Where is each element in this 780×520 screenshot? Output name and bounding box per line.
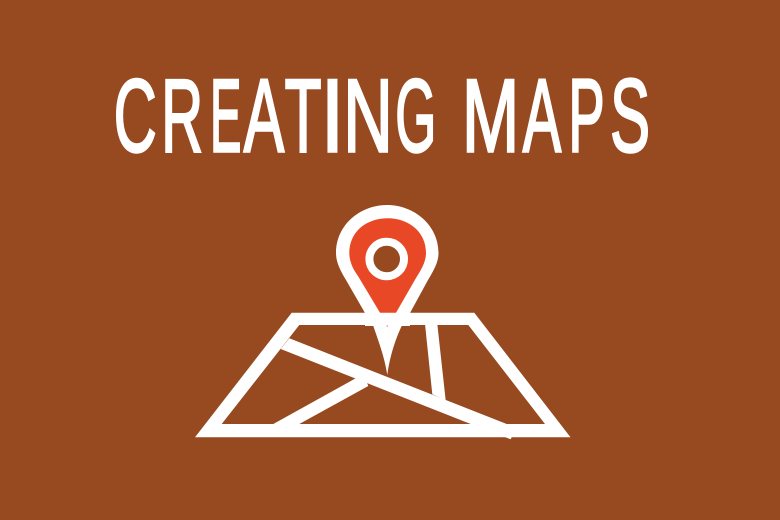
icon: map with location pin	[195, 205, 570, 439]
title: T	[285, 59, 322, 175]
map road: vertical	[425, 324, 446, 400]
pin: red fill	[349, 218, 426, 313]
pin: centre ring	[369, 242, 404, 276]
title: S	[610, 59, 650, 175]
title: N	[343, 59, 393, 175]
title: P	[568, 59, 605, 175]
title: E	[210, 59, 241, 175]
title: I	[321, 59, 344, 175]
map road: long diagonal	[281, 338, 513, 439]
title: R	[161, 59, 203, 175]
map road: lower branch	[273, 378, 368, 428]
map outline	[195, 313, 570, 437]
title: A	[523, 59, 562, 175]
pin: small red point	[386, 325, 388, 327]
title: G	[395, 59, 436, 175]
title: C	[114, 59, 157, 175]
title: M	[462, 59, 519, 175]
title: A	[244, 59, 285, 175]
pin: white outline	[336, 205, 438, 375]
